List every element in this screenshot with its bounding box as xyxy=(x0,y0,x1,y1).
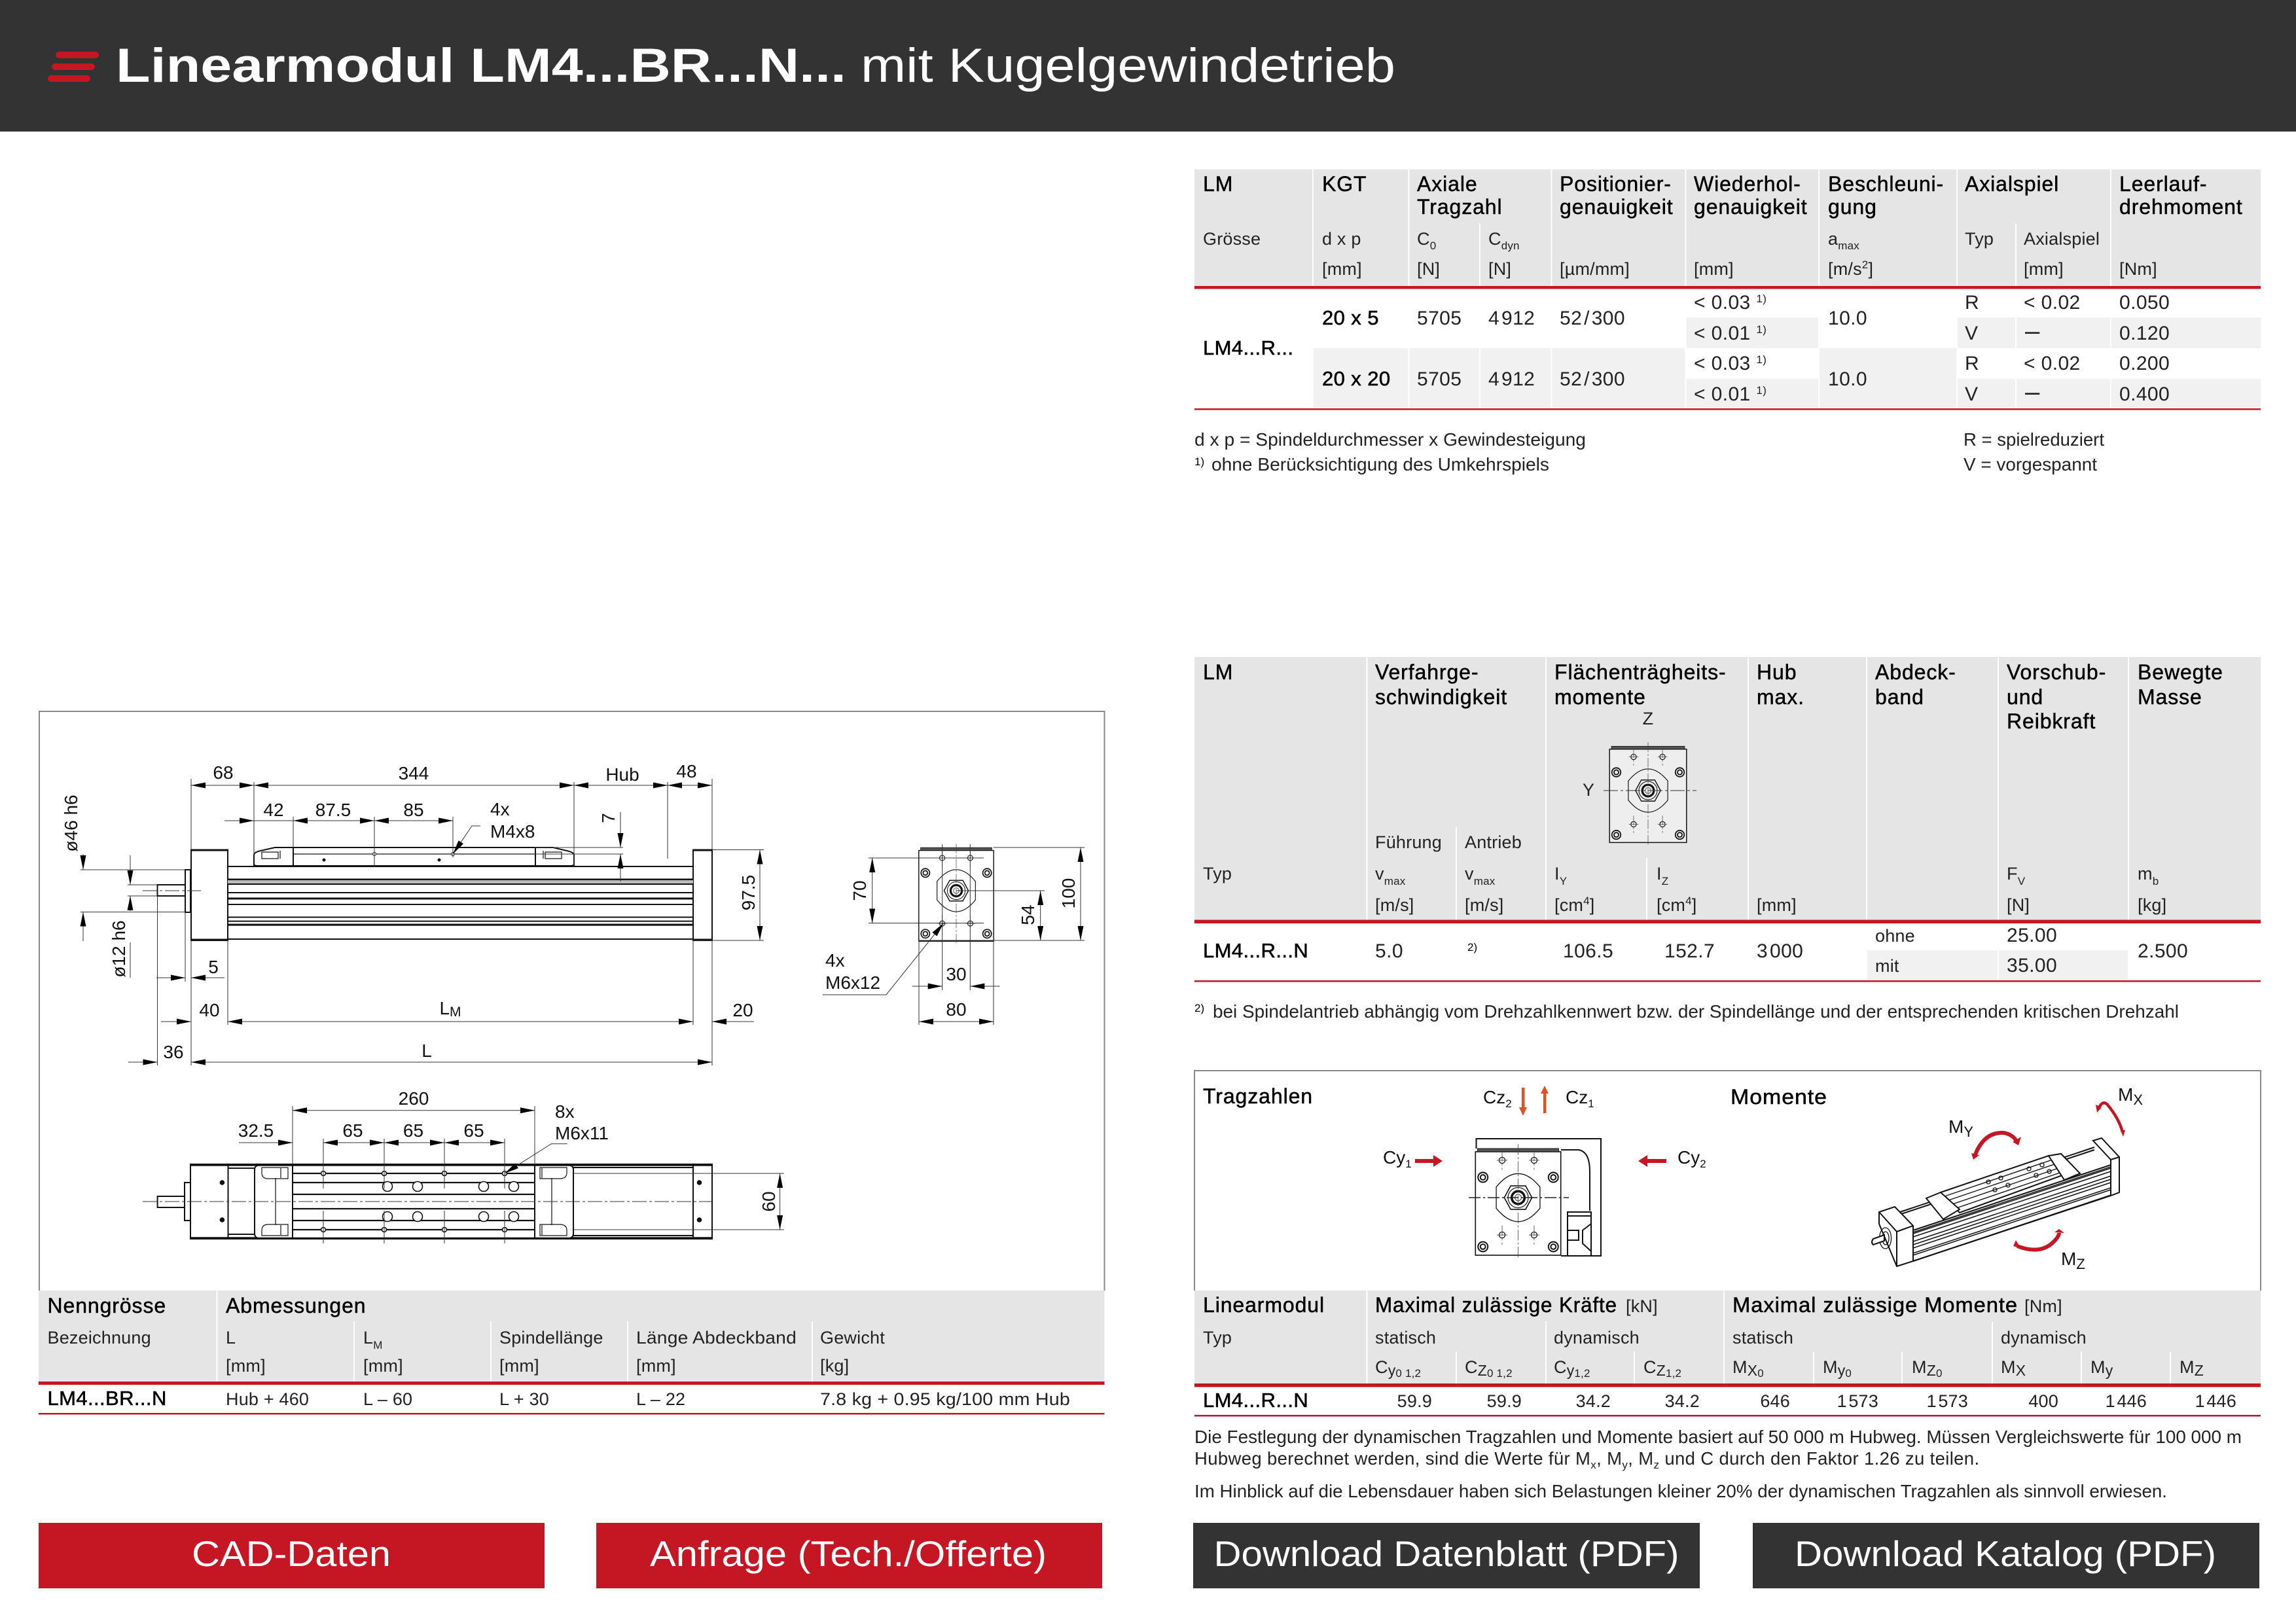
table: zulässige Kräfte und Momente: M xyxy=(1732,1357,1748,1377)
icon: logo bars xyxy=(48,52,99,82)
diagram: moments isometric module xyxy=(1872,1084,2143,1272)
note text: , M xyxy=(1628,1448,1653,1469)
table: Kugelgewindetrieb data: 2 xyxy=(1862,259,1868,271)
table: zulässige Kräfte und Momente: statisch xyxy=(1732,1328,1793,1347)
table: Kugelgewindetrieb data: ] xyxy=(1868,259,1873,279)
table: Kugelgewindetrieb data: 10.0 xyxy=(1828,368,1867,390)
dimension labels: 48 xyxy=(676,761,697,781)
dimension labels: 68 xyxy=(213,762,234,783)
table: Verfahrgeschwindigkeit and masses: v xyxy=(1465,864,1474,883)
table: Kugelgewindetrieb data: [µm/mm] xyxy=(1560,259,1630,279)
table: Kugelgewindetrieb data: KGT xyxy=(1322,172,1367,196)
table: Kugelgewindetrieb data: Typ xyxy=(1965,229,1994,249)
table: zulässige Kräfte und Momente: M xyxy=(2179,1357,2195,1377)
top view drawing: 65 xyxy=(342,1120,363,1141)
table: Abmessungen xyxy=(39,1291,1105,1415)
top view drawing: 60 xyxy=(759,1191,779,1212)
note text: , M xyxy=(1596,1448,1622,1469)
table: Kugelgewindetrieb data: Axialspiel xyxy=(2024,229,2100,249)
footnote: table 2: 2) xyxy=(1194,1002,1204,1014)
dimension labels: 87.5 xyxy=(315,800,351,820)
note text: y xyxy=(1622,1459,1628,1471)
button: Anfrage: Anfrage (Tech./Offerte) xyxy=(650,1533,1047,1574)
dimension labels: L xyxy=(422,1041,432,1061)
table: Verfahrgeschwindigkeit and masses: 2.500 xyxy=(2138,940,2188,962)
table: zulässige Kräfte und Momente: C xyxy=(1643,1357,1657,1377)
end view drawing: 80 xyxy=(946,999,967,1020)
table: Kugelgewindetrieb data: 0.050 xyxy=(2119,292,2170,313)
table: Kugelgewindetrieb data: < 0.02 xyxy=(2024,353,2081,374)
dimension labels: 20 xyxy=(732,1000,753,1020)
table: Kugelgewindetrieb data: R xyxy=(1965,353,1979,374)
table: Verfahrgeschwindigkeit and masses: momente xyxy=(1554,685,1646,709)
table: Verfahrgeschwindigkeit and masses: max xyxy=(1474,875,1496,887)
table: Verfahrgeschwindigkeit and masses: Masse xyxy=(2138,685,2202,709)
table: Kugelgewindetrieb data: < 0.01 xyxy=(1694,383,1751,405)
table: Kugelgewindetrieb data: Grösse xyxy=(1203,229,1261,249)
table: Abmessungen: Länge Abdeckband xyxy=(636,1328,797,1347)
table: Verfahrgeschwindigkeit and masses: Bewegte xyxy=(2138,660,2223,684)
dimension labels: M4x8 xyxy=(490,821,535,842)
footnotes: table 1: V = vorgespannt xyxy=(1964,454,2097,474)
arrow: Mz moment xyxy=(2017,1233,2059,1250)
dimension labels: 5 xyxy=(208,957,219,977)
table: Kugelgewindetrieb data: C xyxy=(1488,229,1501,249)
table: Kugelgewindetrieb data: [mm] xyxy=(1694,259,1734,279)
table: zulässige Kräfte und Momente: X xyxy=(2016,1362,2026,1379)
table: Verfahrgeschwindigkeit and masses: 3 000 xyxy=(1757,940,1803,962)
table: Verfahrgeschwindigkeit and masses: max xyxy=(1384,875,1406,887)
table: zulässige Kräfte und Momente: 400 xyxy=(2028,1391,2058,1411)
title xyxy=(116,39,1395,92)
table: Kugelgewindetrieb data: C xyxy=(1417,229,1430,249)
note text: Die Festlegung der dynamischen Tragzahlen und Momente basiert auf 50 000 m Hubweg. Müssen Vergleichswerte für 100 000 m xyxy=(1194,1427,2242,1447)
table: zulässige Kräfte und Momente: 34.2 xyxy=(1665,1391,1700,1411)
table: Kugelgewindetrieb data: 5705 xyxy=(1417,368,1462,390)
diagram: moments isometric module: Y xyxy=(1964,1124,1973,1140)
table: Kugelgewindetrieb data: Tragzahl xyxy=(1417,195,1503,219)
table: Abmessungen: Bezeichnung xyxy=(47,1328,151,1347)
table: zulässige Kräfte und Momente: 646 xyxy=(1760,1391,1790,1411)
table: Kugelgewindetrieb data: Beschleuni- xyxy=(1828,172,1944,196)
table: Kugelgewindetrieb data: 0 xyxy=(1430,240,1436,252)
end view drawing: 54 xyxy=(1018,904,1038,925)
dimension labels: 7 xyxy=(598,813,619,823)
diagram: moments isometric module: M xyxy=(2061,1249,2076,1269)
table: Kugelgewindetrieb data: d x p xyxy=(1322,229,1361,249)
note text: Hubweg berechnet werden, sind die Werte für M xyxy=(1194,1448,1590,1469)
diagram: load directions: Cz xyxy=(1566,1087,1588,1107)
table: zulässige Kräfte und Momente xyxy=(1194,1291,2261,1416)
end view drawing: 100 xyxy=(1058,878,1079,908)
header band xyxy=(0,0,2296,132)
table: zulässige Kräfte und Momente: 0 xyxy=(1845,1367,1852,1380)
table: Verfahrgeschwindigkeit and masses: LM xyxy=(1203,660,1233,684)
table: Kugelgewindetrieb data: 52 / 300 xyxy=(1560,368,1625,390)
footnotes: table 1: 1) xyxy=(1194,455,1204,468)
end view drawing: 70 xyxy=(850,880,870,901)
table: Verfahrgeschwindigkeit and masses: [cm xyxy=(1657,895,1685,915)
note text: x xyxy=(1590,1459,1596,1471)
table: Kugelgewindetrieb data: 5705 xyxy=(1417,308,1462,329)
table: Abmessungen: L xyxy=(226,1328,236,1347)
table: Verfahrgeschwindigkeit and masses: Z xyxy=(1662,875,1668,887)
panel: Tragzahlen and Momente xyxy=(1194,1071,2261,1291)
footnotes: table 1: ohne Berücksichtigung des Umkehrspiels xyxy=(1211,454,1549,474)
diagram: load directions xyxy=(1383,1086,1706,1260)
arrow: Cy1 xyxy=(1415,1155,1443,1167)
button: CAD-Daten xyxy=(39,1523,545,1588)
table: Kugelgewindetrieb data: – xyxy=(2025,317,2040,346)
table: Verfahrgeschwindigkeit and masses: [cm xyxy=(1554,895,1583,915)
table: Kugelgewindetrieb data: 1) xyxy=(1756,323,1767,336)
footnotes: table 1: d x p = Spindeldurchmesser x Gewindesteigung xyxy=(1194,429,1586,450)
note text xyxy=(1194,1427,2242,1501)
table: Kugelgewindetrieb data: 1) xyxy=(1756,384,1767,397)
top view drawing: 260 xyxy=(399,1088,429,1109)
dimension labels: ø46 h6 xyxy=(61,794,81,852)
table: Verfahrgeschwindigkeit and masses: I xyxy=(1554,864,1560,883)
table: Verfahrgeschwindigkeit and masses: Y xyxy=(1560,875,1567,887)
table: Kugelgewindetrieb data: LM xyxy=(1203,172,1233,196)
table: Kugelgewindetrieb data: 20 x 20 xyxy=(1322,367,1390,390)
table: Verfahrgeschwindigkeit and masses: 35.00 xyxy=(2007,955,2057,976)
table: Verfahrgeschwindigkeit and masses: [m/s] xyxy=(1465,895,1504,915)
diagram: load directions: Cz xyxy=(1483,1087,1505,1107)
end view drawing: 4x xyxy=(825,950,845,971)
dimension lines xyxy=(81,779,764,1065)
dimension labels: 42 xyxy=(263,800,284,820)
table: zulässige Kräfte und Momente: 1 573 xyxy=(1927,1391,1968,1411)
table: zulässige Kräfte und Momente: 0 1,2 xyxy=(1487,1367,1513,1380)
arrow: Cz1 xyxy=(1541,1086,1549,1113)
table: Verfahrgeschwindigkeit and masses: [kg] xyxy=(2138,895,2166,915)
panel: technical drawing xyxy=(39,711,1105,1291)
table: Kugelgewindetrieb data: 10.0 xyxy=(1828,308,1867,329)
button: CAD-Daten: CAD-Daten xyxy=(192,1533,391,1574)
table: zulässige Kräfte und Momente: M xyxy=(1823,1357,1838,1377)
table: Verfahrgeschwindigkeit and masses: [mm] xyxy=(1757,895,1797,915)
table: Kugelgewindetrieb data: max xyxy=(1838,240,1859,252)
footnotes: table 1: R = spielreduziert xyxy=(1964,429,2104,450)
dimension labels: 344 xyxy=(399,763,429,783)
table: zulässige Kräfte und Momente: [kN] xyxy=(1626,1296,1658,1316)
end view drawing: M6x12 xyxy=(825,972,880,993)
table: zulässige Kräfte und Momente: M xyxy=(1912,1357,1927,1377)
table: zulässige Kräfte und Momente: M xyxy=(2090,1357,2106,1377)
table: Verfahrgeschwindigkeit and masses: band xyxy=(1875,685,1924,709)
arrow: Mx moment xyxy=(2098,1103,2123,1132)
dimension labels: 85 xyxy=(403,800,424,820)
table: Kugelgewindetrieb data: [N] xyxy=(1417,259,1440,279)
table: zulässige Kräfte und Momente: [Nm] xyxy=(2024,1296,2062,1316)
table: Verfahrgeschwindigkeit and masses: V xyxy=(2018,875,2026,887)
table: Kugelgewindetrieb data: 0.120 xyxy=(2119,323,2170,344)
table: zulässige Kräfte und Momente: M xyxy=(2001,1357,2016,1377)
table: Verfahrgeschwindigkeit and masses: 152.7 xyxy=(1664,940,1715,962)
table: zulässige Kräfte und Momente: Typ xyxy=(1203,1328,1232,1347)
table: Verfahrgeschwindigkeit and masses: 106.5 xyxy=(1563,940,1613,962)
table: Kugelgewindetrieb data: a xyxy=(1828,229,1838,249)
table: zulässige Kräfte und Momente: 34.2 xyxy=(1576,1391,1611,1411)
table: zulässige Kräfte und Momente: y xyxy=(1567,1362,1575,1379)
carriage xyxy=(254,847,293,866)
table: Abmessungen: 7.8 kg + 0.95 kg/100 mm Hub xyxy=(820,1389,1070,1409)
table: Verfahrgeschwindigkeit and masses: [N] xyxy=(2007,895,2030,915)
table: Verfahrgeschwindigkeit and masses: 4 xyxy=(1685,895,1692,907)
icon: end plate with Y and Z axes xyxy=(1583,709,1696,846)
top view drawing xyxy=(143,1088,784,1243)
table: Kugelgewindetrieb data: [N] xyxy=(1488,259,1511,279)
top view drawing: 65 xyxy=(463,1120,484,1141)
footnotes: table 1 xyxy=(1194,429,2104,474)
table: zulässige Kräfte und Momente: statisch xyxy=(1375,1328,1436,1347)
table: zulässige Kräfte und Momente: Z xyxy=(1657,1362,1666,1379)
diagram: moments isometric module: M xyxy=(1948,1116,1964,1137)
top view drawing: M6x11 xyxy=(555,1123,609,1143)
table: zulässige Kräfte und Momente: dynamisch xyxy=(2001,1328,2087,1347)
table: Verfahrgeschwindigkeit and masses: schwindigkeit xyxy=(1375,685,1507,709)
table: Verfahrgeschwindigkeit and masses: [m/s] xyxy=(1375,895,1414,915)
title: Linearmodul LM4...BR...N... xyxy=(116,39,846,92)
arrow: Cz2 xyxy=(1519,1088,1527,1116)
table: Verfahrgeschwindigkeit and masses: mit xyxy=(1875,956,1899,976)
table: Verfahrgeschwindigkeit and masses: 25.00 xyxy=(2007,925,2057,946)
table: Kugelgewindetrieb data: 4 912 xyxy=(1488,368,1535,390)
table: Verfahrgeschwindigkeit and masses: Führung xyxy=(1375,832,1442,852)
table: zulässige Kräfte und Momente: dynamisch xyxy=(1554,1328,1640,1347)
table: Kugelgewindetrieb data: Axiale xyxy=(1417,172,1478,196)
table: Kugelgewindetrieb data: 1) xyxy=(1756,293,1767,305)
table: zulässige Kräfte und Momente: y xyxy=(1838,1362,1846,1379)
button: Anfrage xyxy=(596,1523,1102,1588)
table: Kugelgewindetrieb data: 0.200 xyxy=(2119,353,2170,374)
button: Download Datenblatt: Download Datenblatt (PDF) xyxy=(1213,1533,1679,1574)
icon: end plate with Y and Z axes: Z xyxy=(1643,709,1653,728)
table: Verfahrgeschwindigkeit and masses: Reibkraft xyxy=(2007,709,2096,733)
table: Kugelgewindetrieb data: dyn xyxy=(1501,240,1520,252)
table: Kugelgewindetrieb data: genauigkeit xyxy=(1694,195,1808,219)
table: zulässige Kräfte und Momente: 1 573 xyxy=(1837,1391,1878,1411)
table: Verfahrgeschwindigkeit and masses: Flächenträgheits- xyxy=(1554,660,1727,684)
table: Kugelgewindetrieb data: Wiederhol- xyxy=(1694,172,1801,196)
dimension labels: M xyxy=(450,1005,461,1020)
dimension labels: 36 xyxy=(163,1042,184,1062)
table: Kugelgewindetrieb data: V xyxy=(1965,383,1978,405)
table: zulässige Kräfte und Momente: C xyxy=(1375,1357,1388,1377)
table: Verfahrgeschwindigkeit and masses: Antrieb xyxy=(1465,832,1522,852)
table: Kugelgewindetrieb data: < 0.03 xyxy=(1694,292,1751,313)
table: Kugelgewindetrieb data: Axialspiel xyxy=(1965,172,2059,196)
table: zulässige Kräfte und Momente: Maximal zulässige Kräfte xyxy=(1375,1293,1617,1317)
title: mit Kugelgewindetrieb xyxy=(861,39,1395,92)
table: Abmessungen: L – 60 xyxy=(363,1389,412,1409)
table: zulässige Kräfte und Momente: 0 xyxy=(1757,1367,1764,1380)
table: Verfahrgeschwindigkeit and masses: Abdeck- xyxy=(1875,660,1956,684)
dimension labels: 97.5 xyxy=(738,875,759,910)
table: zulässige Kräfte und Momente: 1,2 xyxy=(1574,1367,1590,1380)
table: Verfahrgeschwindigkeit and masses: 4 xyxy=(1583,895,1590,907)
table: Kugelgewindetrieb data: R xyxy=(1965,292,1979,313)
table: Kugelgewindetrieb data: Leerlauf- xyxy=(2119,172,2207,196)
note text: Im Hinblick auf die Lebensdauer haben sich Belastungen kleiner 20% der dynamischen Tragzahlen als sinnvoll erwiesen. xyxy=(1194,1481,2167,1501)
note text: und C durch den Faktor 1.26 zu teilen. xyxy=(1659,1448,1979,1469)
table: Verfahrgeschwindigkeit and masses: Verfahrge- xyxy=(1375,660,1479,684)
table: Kugelgewindetrieb data: 20 x 5 xyxy=(1322,306,1379,329)
diagram: load directions: 1 xyxy=(1588,1097,1594,1110)
table: Verfahrgeschwindigkeit and masses: Vorschub- xyxy=(2007,660,2106,684)
table: Verfahrgeschwindigkeit and masses: F xyxy=(2007,864,2018,883)
table: Abmessungen: Spindellänge xyxy=(499,1328,603,1347)
table: zulässige Kräfte und Momente: 59.9 xyxy=(1397,1391,1432,1411)
table: Kugelgewindetrieb data: [Nm] xyxy=(2119,259,2157,279)
table: zulässige Kräfte und Momente: C xyxy=(1554,1357,1567,1377)
table: Verfahrgeschwindigkeit and masses: 2) xyxy=(1467,941,1477,954)
table: Abmessungen: [mm] xyxy=(363,1356,403,1376)
table: zulässige Kräfte und Momente: y xyxy=(2106,1362,2113,1379)
table: Abmessungen: Gewicht xyxy=(820,1328,885,1347)
dimension labels: L xyxy=(439,998,450,1018)
diagram: moments isometric module: M xyxy=(2118,1084,2133,1105)
table: zulässige Kräfte und Momente: y xyxy=(1388,1362,1396,1379)
table: Kugelgewindetrieb data: [m/s xyxy=(1828,259,1862,279)
table: Kugelgewindetrieb data: < 0.01 xyxy=(1694,323,1751,344)
table: Abmessungen: Hub + 460 xyxy=(226,1389,309,1409)
table: Kugelgewindetrieb data: 0.400 xyxy=(2119,383,2170,405)
table: Verfahrgeschwindigkeit and masses xyxy=(1194,657,2261,982)
end view drawing xyxy=(823,844,1085,1025)
table: zulässige Kräfte und Momente: 0 1,2 xyxy=(1395,1367,1421,1380)
table: Kugelgewindetrieb data: < 0.03 xyxy=(1694,353,1751,374)
table: Abmessungen: Abmessungen xyxy=(226,1294,366,1317)
side view drawing xyxy=(61,761,764,1065)
table: zulässige Kräfte und Momente: Maximal zulässige Momente xyxy=(1732,1293,2018,1317)
table: Kugelgewindetrieb data: genauigkeit xyxy=(1560,195,1674,219)
table: zulässige Kräfte und Momente: Z xyxy=(1927,1362,1936,1379)
dimension labels: 40 xyxy=(199,1000,220,1020)
diagram: moments isometric module: Z xyxy=(2076,1256,2085,1272)
table: Verfahrgeschwindigkeit and masses: b xyxy=(2153,875,2159,887)
table: Verfahrgeschwindigkeit and masses: m xyxy=(2138,864,2153,883)
table: Kugelgewindetrieb data: – xyxy=(2025,378,2040,406)
table: zulässige Kräfte und Momente: 1,2 xyxy=(1666,1367,1681,1380)
dimension labels xyxy=(61,761,759,1062)
table: zulässige Kräfte und Momente: 1 446 xyxy=(2195,1391,2236,1411)
button: Download Datenblatt xyxy=(1193,1523,1700,1588)
diagram: load directions: 1 xyxy=(1405,1158,1412,1170)
footnote: table 2: bei Spindelantrieb abhängig vom Drehzahlkennwert bzw. der Spindellänge und der entsprechenden kritischen Drehzahl xyxy=(1213,1001,2179,1022)
table: Verfahrgeschwindigkeit and masses: Hub xyxy=(1757,660,1797,684)
table: zulässige Kräfte und Momente: LM4...R...N xyxy=(1203,1389,1308,1412)
top view drawing: 8x xyxy=(555,1101,575,1122)
dimension labels: ø12 h6 xyxy=(109,920,129,978)
dimension labels: Hub xyxy=(605,764,639,785)
table: Abmessungen: L – 22 xyxy=(636,1389,685,1409)
diagram: load directions: 2 xyxy=(1505,1097,1512,1110)
table: Verfahrgeschwindigkeit and masses: v xyxy=(1375,864,1384,883)
table: Abmessungen: M xyxy=(373,1339,383,1351)
top view drawing: 32.5 xyxy=(238,1120,274,1141)
table: Kugelgewindetrieb data xyxy=(1194,169,2261,410)
table: Kugelgewindetrieb data: V xyxy=(1965,323,1978,344)
arrow: My moment xyxy=(1975,1133,2017,1154)
arrow: Cy2 xyxy=(1638,1155,1666,1167)
table: Verfahrgeschwindigkeit and masses: Typ xyxy=(1203,864,1232,883)
table: Kugelgewindetrieb data: 52 / 300 xyxy=(1560,308,1625,329)
table: zulässige Kräfte und Momente: X xyxy=(1748,1362,1757,1379)
table: Kugelgewindetrieb data: Positionier- xyxy=(1560,172,1672,196)
table: Verfahrgeschwindigkeit and masses: und xyxy=(2007,685,2043,709)
table: Kugelgewindetrieb data: LM4...R... xyxy=(1203,336,1293,359)
table: Verfahrgeschwindigkeit and masses: LM4...R...N xyxy=(1203,939,1308,962)
table: Verfahrgeschwindigkeit and masses: 5.0 xyxy=(1375,940,1403,962)
end view drawing: 30 xyxy=(946,964,967,984)
table: Kugelgewindetrieb data: 1) xyxy=(1756,353,1767,366)
table: zulässige Kräfte und Momente: Z xyxy=(2195,1362,2204,1379)
table: Verfahrgeschwindigkeit and masses: ] xyxy=(1590,895,1594,915)
diagram: load directions: Cy xyxy=(1383,1147,1405,1168)
diagram: load directions: Cy xyxy=(1677,1147,1700,1168)
table: Abmessungen: Nenngrösse xyxy=(47,1294,166,1317)
icon: end plate with Y and Z axes: Y xyxy=(1583,780,1594,800)
table: Verfahrgeschwindigkeit and masses: I xyxy=(1657,864,1662,883)
table: Kugelgewindetrieb data: [mm] xyxy=(1322,259,1362,279)
panel: Tragzahlen and Momente: Tragzahlen xyxy=(1203,1084,1313,1108)
diagram: moments isometric module: X xyxy=(2133,1092,2143,1108)
table: Abmessungen: [mm] xyxy=(636,1356,676,1376)
table: Abmessungen: LM4...BR...N xyxy=(47,1387,167,1410)
table: Abmessungen: [kg] xyxy=(820,1356,849,1376)
table: Abmessungen: [mm] xyxy=(226,1356,266,1376)
table: Kugelgewindetrieb data: 4 912 xyxy=(1488,308,1535,329)
note text: z xyxy=(1653,1459,1659,1471)
panel: Tragzahlen and Momente: Momente xyxy=(1731,1085,1827,1109)
table: Verfahrgeschwindigkeit and masses: max. xyxy=(1757,685,1804,709)
table: zulässige Kräfte und Momente: 59.9 xyxy=(1487,1391,1522,1411)
dimension labels: 4x xyxy=(490,799,510,819)
table: zulässige Kräfte und Momente: C xyxy=(1465,1357,1478,1377)
button: Download Katalog xyxy=(1753,1523,2259,1588)
table: Abmessungen: L xyxy=(363,1328,373,1347)
table: Kugelgewindetrieb data: drehmoment xyxy=(2119,195,2243,219)
table: Kugelgewindetrieb data: < 0.02 xyxy=(2024,292,2081,313)
table: Abmessungen: L + 30 xyxy=(499,1389,549,1409)
table: zulässige Kräfte und Momente: Linearmodul xyxy=(1203,1293,1325,1317)
table: Verfahrgeschwindigkeit and masses: ] xyxy=(1692,895,1696,915)
button: Download Katalog: Download Katalog (PDF) xyxy=(1795,1533,2216,1574)
table: zulässige Kräfte und Momente: Z xyxy=(1478,1362,1487,1379)
table: Abmessungen: [mm] xyxy=(499,1356,539,1376)
table: zulässige Kräfte und Momente: 0 xyxy=(1936,1367,1943,1380)
table: Kugelgewindetrieb data: [mm] xyxy=(2024,259,2064,279)
table: zulässige Kräfte und Momente: 1 446 xyxy=(2106,1391,2147,1411)
top view drawing: 65 xyxy=(403,1120,423,1141)
table: Kugelgewindetrieb data: gung xyxy=(1828,195,1877,219)
diagram: load directions: 2 xyxy=(1700,1158,1706,1170)
table: Verfahrgeschwindigkeit and masses: ohne xyxy=(1875,926,1915,946)
